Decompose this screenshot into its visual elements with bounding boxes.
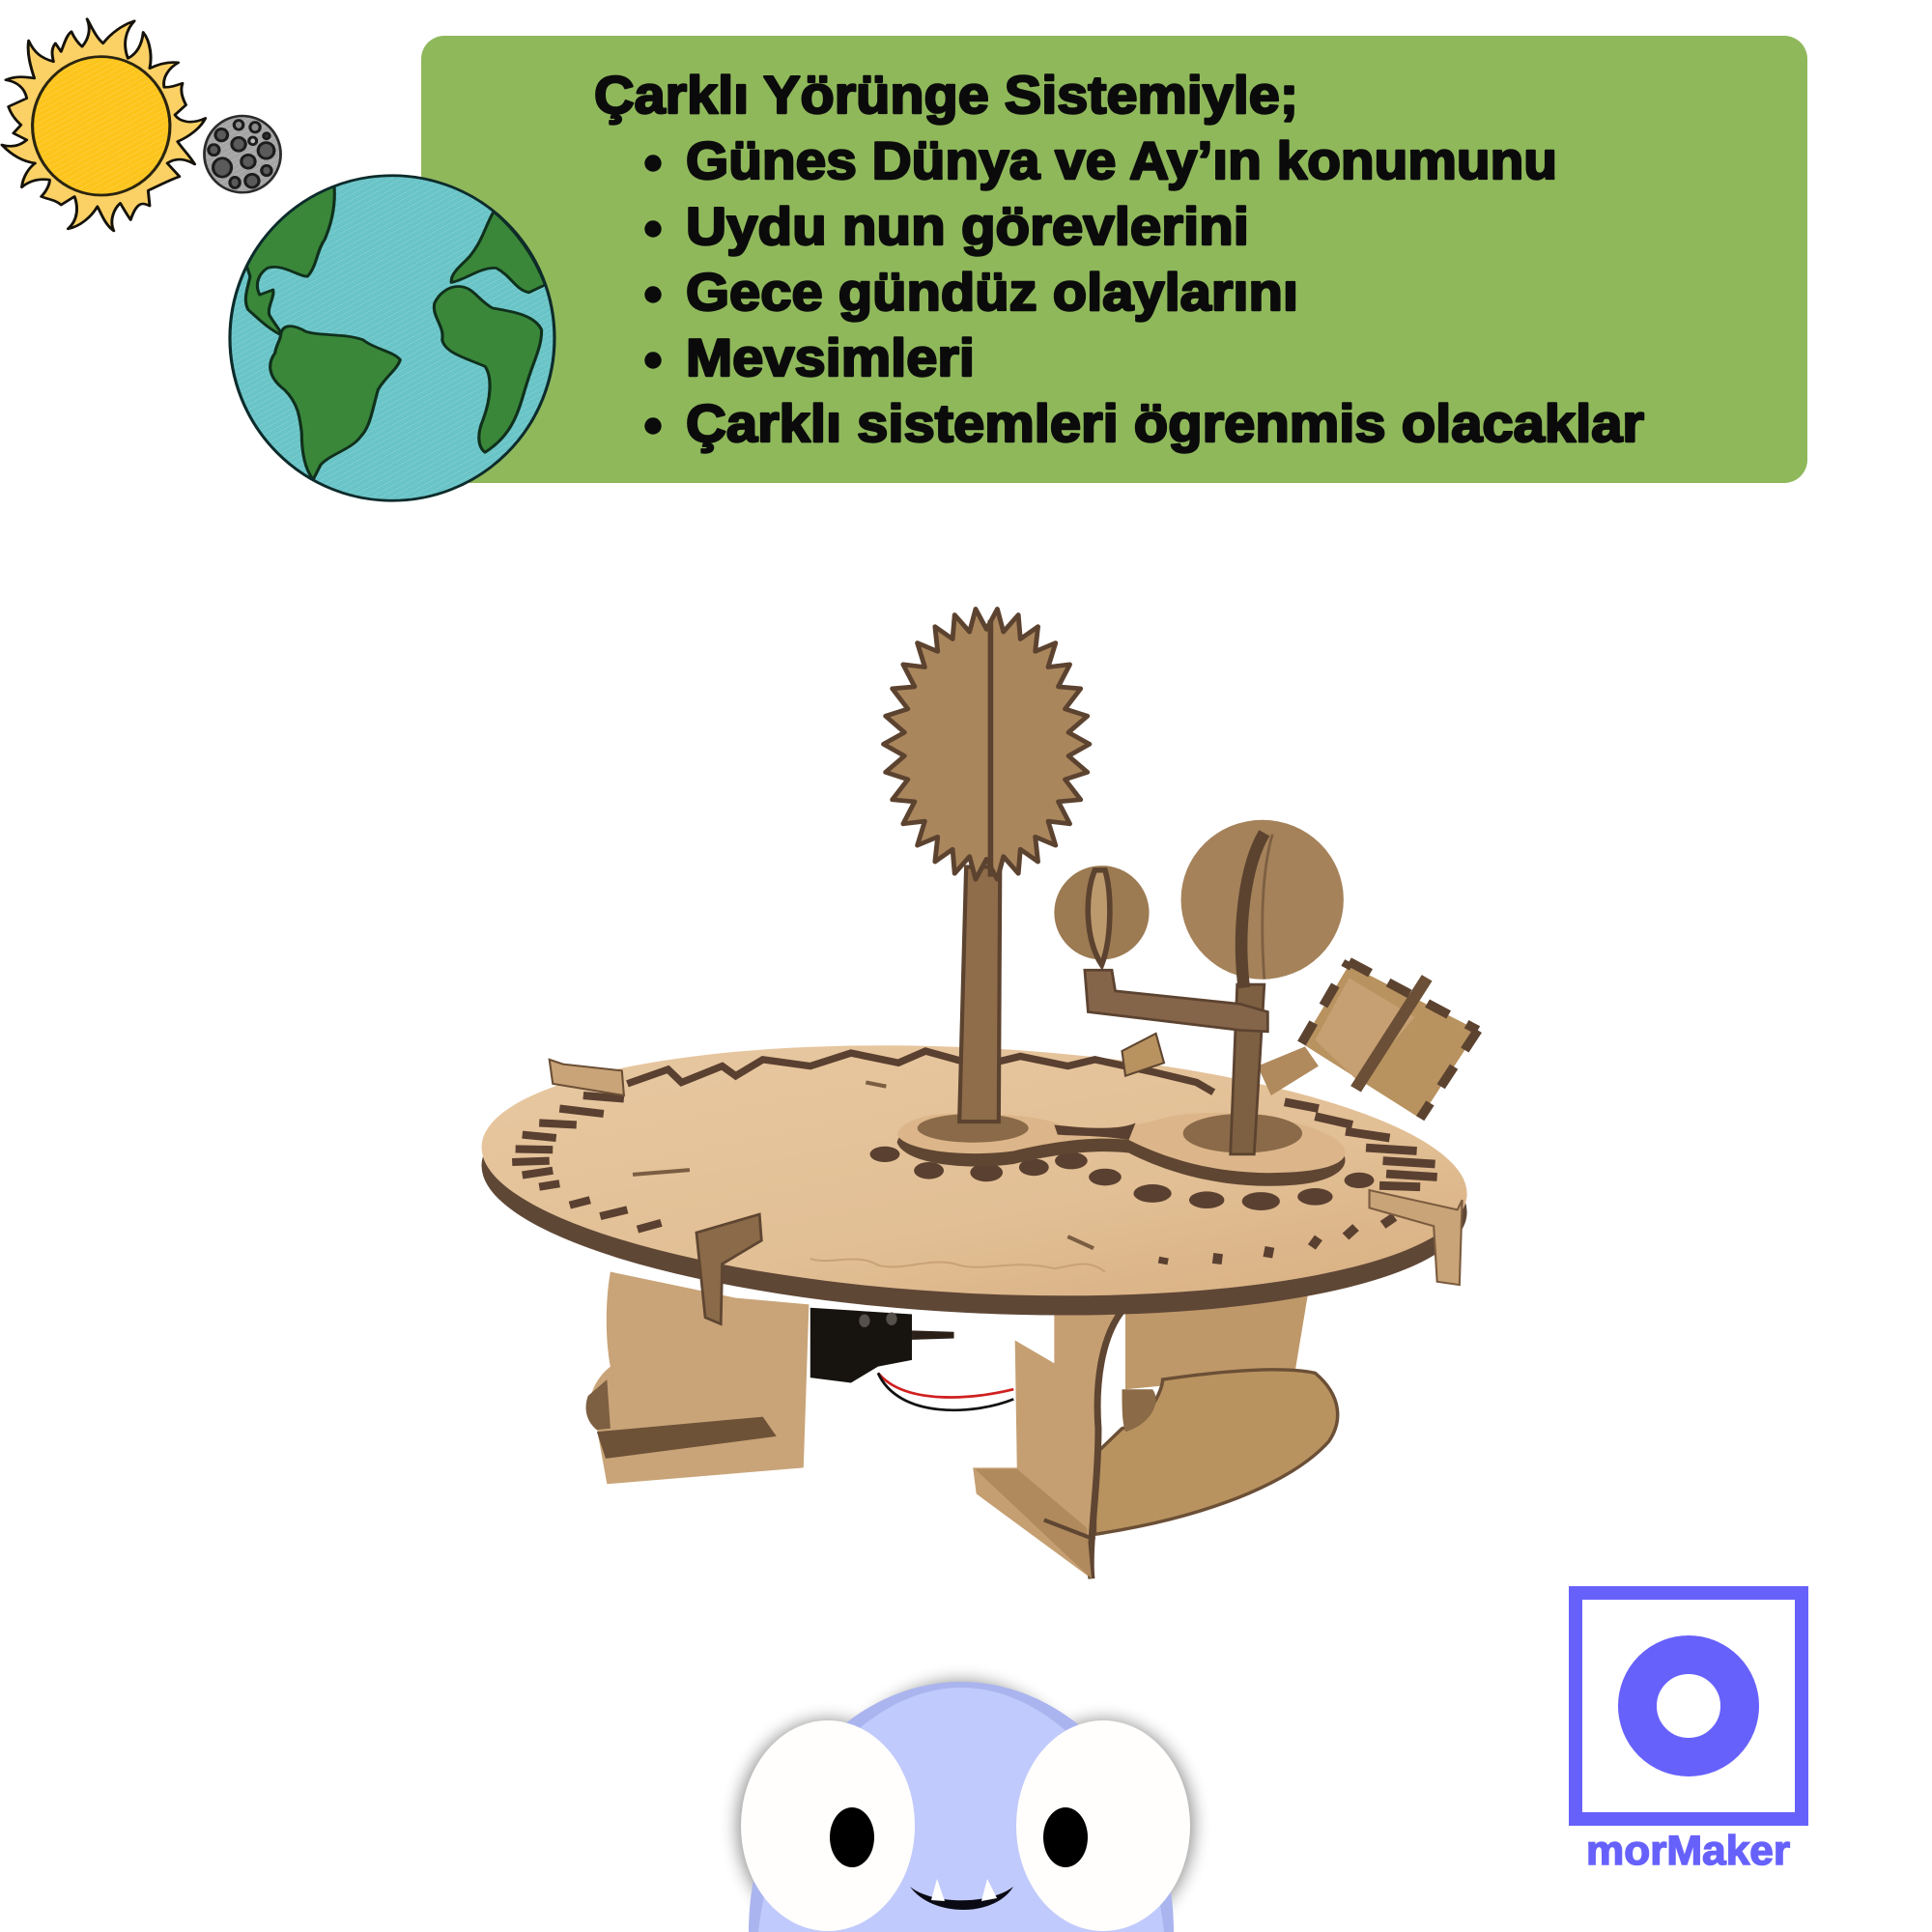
disc back zigzag	[627, 1051, 1213, 1093]
cube: sun-facing box satellite	[1258, 961, 1478, 1119]
model earth	[1181, 820, 1344, 987]
mascot mouth	[910, 1879, 1013, 1910]
logo wordmark: morMaker	[1586, 1828, 1790, 1874]
bullet 5: Çarklı sistemleri ögrenmis olacaklar	[686, 393, 1644, 453]
model moon	[1054, 866, 1150, 965]
sun pole	[959, 867, 1000, 1122]
support tabs	[550, 1034, 1463, 1324]
logo: morMaker	[1576, 1593, 1802, 1874]
bullet 1: Günes Dünya ve Ay’ın konumunu	[686, 130, 1557, 190]
bullet 2: Uydu nun görevlerini	[686, 196, 1249, 256]
logo ring	[1637, 1655, 1740, 1757]
bullet 3: Gece gündüz olaylarını	[686, 262, 1298, 322]
mascot shadow	[738, 1682, 1193, 1932]
disc top surface	[475, 1023, 1473, 1318]
front leg	[973, 1311, 1122, 1578]
left leg	[586, 1272, 809, 1484]
back leg and curved base	[1094, 1292, 1338, 1534]
icon: moon	[204, 116, 281, 192]
mascot	[738, 1682, 1193, 1932]
orbit arm	[897, 1113, 1346, 1186]
mascot right eye	[1016, 1720, 1190, 1931]
sun gear	[884, 609, 1090, 879]
logo frame	[1576, 1593, 1802, 1819]
bullet 4: Mevsimleri	[686, 327, 975, 387]
disc slots	[633, 1083, 1105, 1272]
moon arm	[1085, 970, 1267, 1032]
text block: learning outcomes	[594, 65, 1644, 453]
panel: green info box	[421, 36, 1807, 483]
mascot left eye	[741, 1720, 915, 1931]
mascot head	[749, 1682, 1174, 1932]
battery holder and wires	[810, 1308, 1013, 1410]
gears	[870, 1147, 1374, 1210]
earth pole	[1231, 984, 1264, 1154]
heading: Çarklı Yörünge Sistemiyle;	[594, 65, 1298, 125]
wooden orrery model	[475, 609, 1478, 1578]
disc rim	[475, 1040, 1474, 1338]
icon: earth	[229, 173, 557, 503]
icon: sun	[2, 19, 206, 231]
disc teeth	[512, 1095, 1437, 1264]
